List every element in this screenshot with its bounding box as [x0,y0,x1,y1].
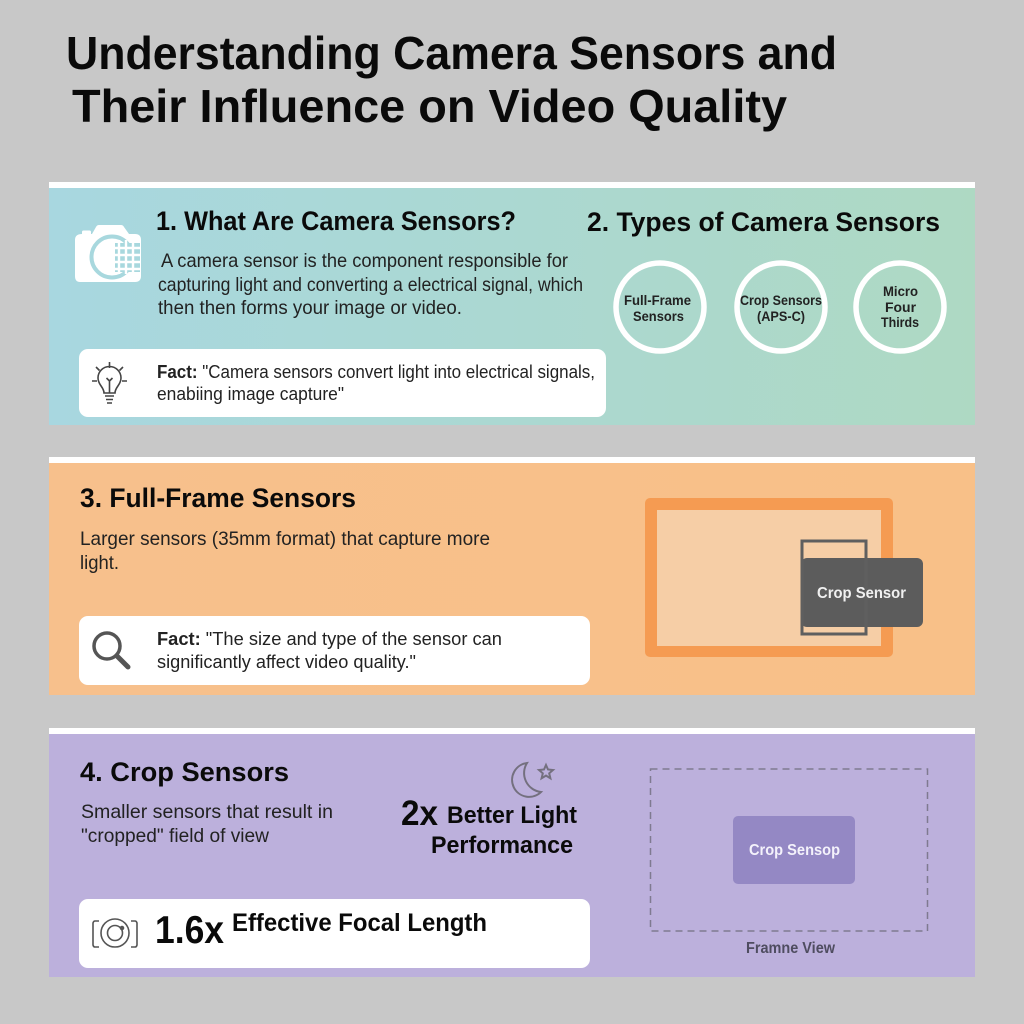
stat: 2x better light performance: 2x [401,794,439,833]
diagram: full-frame versus crop sensor [645,498,923,657]
sensor type: full-frame: Sensors [633,308,684,324]
sensor type: micro four thirds: Micro [883,283,918,299]
stat: 2x better light performance: Performance [431,832,573,859]
heading: what are camera sensors: 1. What Are Camera Sensors? [156,206,516,236]
callout: effective focal length: 1.6x [155,909,224,952]
text block: crop sensor description [81,801,333,847]
text block: sensor definition [158,250,583,319]
sensor type: micro four thirds: Four [885,299,917,315]
sensor type: crop [737,263,825,351]
label: crop sensor: Crop Sensor [817,585,906,602]
callout: fact on video quality: significantly affect video quality." [157,652,416,672]
text block: crop sensor description: Smaller sensors that result in [81,801,333,823]
panel: crop sensors [49,728,975,977]
heading: full-frame sensors: 3. Full-Frame Sensors [80,483,356,513]
callout: fact on signals [79,349,606,417]
heading: types of camera sensors: 2. Types of Camera Sensors [587,207,940,237]
sensor type: micro four thirds [856,263,944,351]
callout: effective focal length [79,899,590,968]
icon: moon and star [512,763,553,797]
heading: crop sensors: 4. Crop Sensors [80,757,289,787]
text block: sensor definition: capturing light and converting a electrical signal, which [158,274,583,296]
text block: crop sensor description: "cropped" field of view [81,825,270,847]
panel: camera sensors and types [49,182,975,425]
callout: fact on video quality [79,616,590,685]
panel: full-frame sensors [49,457,975,695]
text block: full-frame description [80,528,490,574]
title [66,27,837,132]
label: crop sensop: Crop Sensop [749,842,840,859]
title: Understanding Camera Sensors and [66,27,837,79]
icon: camera with sensor grid [75,225,141,282]
icon: lens [93,919,137,947]
icon: magnifier [94,633,128,667]
text block: sensor definition: then then forms your image or video. [158,297,462,319]
diagram: crop sensor in frame view [650,769,928,957]
title: Their Influence on Video Quality [72,80,787,132]
text block: full-frame description: Larger sensors (35mm format) that capture more [80,528,490,550]
sensor type: crop: (APS-C) [757,308,805,324]
label: frame view: Framne View [746,940,836,957]
text block: sensor definition: A camera sensor is the component responsible for [161,250,568,272]
sensor type: full-frame [616,263,704,351]
callout: fact on video quality: Fact: "The size and type of the sensor can [157,629,502,649]
callout: effective focal length: Effective Focal Length [232,909,487,937]
icon: lightbulb [92,362,127,403]
sensor type: full-frame: Full-Frame [624,292,691,308]
callout: fact on signals: enabiing image capture" [157,384,344,404]
stat: 2x better light performance [401,794,577,859]
sensor type: micro four thirds: Thirds [881,314,919,330]
stat: 2x better light performance: Better Light [447,802,577,829]
callout: fact on signals: Fact: "Camera sensors convert light into electrical signals, [157,362,595,382]
sensor type: crop: Crop Sensors [740,292,822,308]
text block: full-frame description: light. [80,552,119,574]
